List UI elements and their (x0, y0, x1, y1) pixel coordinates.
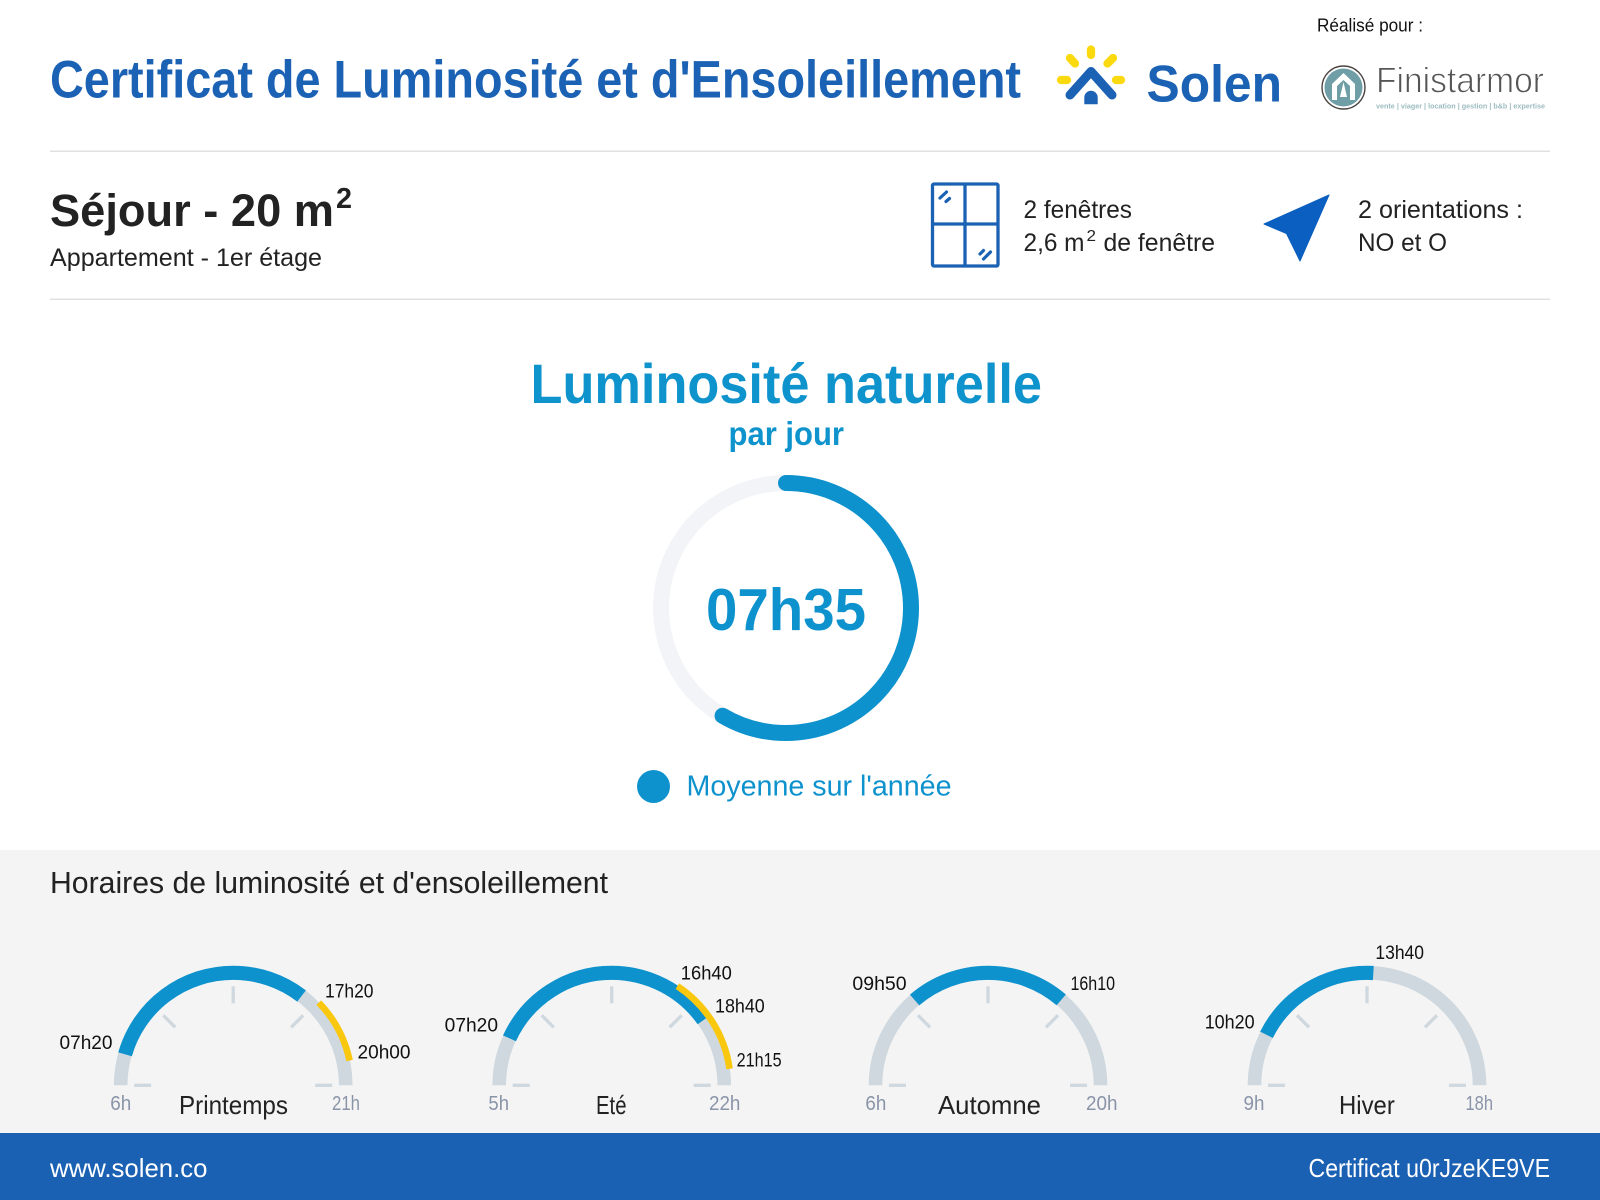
footer (0, 1133, 1600, 1200)
gauge: Eté: 5h (488, 1093, 509, 1115)
gauge: Automne (852, 973, 1118, 1120)
gauge: Hiver: 13h40 (1375, 943, 1424, 964)
panel: schedules (0, 850, 1600, 1134)
Solen wordmark: Solen (1146, 56, 1282, 114)
orientation details (1358, 196, 1523, 257)
icon: Finistarmor emblem (1322, 66, 1365, 109)
icon: sun rays (1061, 50, 1121, 80)
gauge: Printemps: 6h (110, 1093, 131, 1115)
icon: orientation arrow (1264, 195, 1329, 261)
credit label: Réalisé pour : (1317, 16, 1423, 36)
gauge: Hiver (1205, 943, 1493, 1120)
gauge: Hiver: 9h (1244, 1093, 1264, 1115)
gauge: Hiver: Hiver (1339, 1090, 1395, 1120)
gauge: Hiver: 10h20 (1205, 1012, 1255, 1033)
legend: Moyenne sur l'année (686, 770, 952, 802)
gauge: Automne: 20h (1086, 1093, 1118, 1115)
logo: Finistarmor (1322, 60, 1545, 110)
gauge: Printemps: 07h20 (60, 1033, 112, 1054)
daily value: 07h35 (706, 577, 866, 643)
gauge: Printemps: 20h00 (358, 1043, 410, 1064)
gauge: Automne: 16h10 (1070, 974, 1115, 995)
window details: de fenêtre (1104, 229, 1215, 257)
gauge: Eté: Eté (596, 1090, 626, 1120)
gauge: Automne: 6h (865, 1093, 886, 1115)
icon: window (932, 184, 998, 266)
donut chart: daily average (661, 483, 911, 733)
gauge: Printemps: Printemps (179, 1090, 288, 1120)
subheading: per day: par jour (728, 415, 844, 452)
icon: house door (1084, 91, 1098, 104)
title: Certificat de Luminosité et d'Ensoleillement (50, 50, 1021, 110)
gauge: Eté: 16h40 (681, 963, 732, 984)
gauge: Printemps (60, 966, 410, 1120)
certificate id: Certificat u0rJzeKE9VE (1308, 1153, 1550, 1183)
icon: house roof (1070, 72, 1112, 95)
gauge: Printemps: 21h (332, 1093, 360, 1115)
logo: Solen (1061, 50, 1282, 114)
gauge: Printemps: 17h20 (325, 982, 374, 1003)
room heading: 2 (336, 183, 352, 215)
gauge: Eté: 21h15 (737, 1051, 782, 1072)
gauge: Eté: 07h20 (445, 1016, 498, 1037)
gauge: Hiver: 18h (1466, 1093, 1493, 1115)
heading: natural light: Luminosité naturelle (530, 352, 1042, 415)
window details: 2 fenêtres (1024, 196, 1132, 224)
orientation details: NO et O (1358, 229, 1447, 257)
gauge: Eté: 22h (709, 1093, 740, 1115)
orientation details: 2 orientations : (1358, 196, 1523, 224)
room heading: Séjour - 20 m (50, 185, 334, 236)
gauge: Automne: 09h50 (852, 974, 907, 995)
room subtitle: Appartement - 1er étage (50, 244, 322, 272)
Finistarmor wordmark: Finistarmor (1376, 60, 1544, 100)
gauge: Eté: 18h40 (715, 996, 765, 1017)
window details: 2 (1086, 228, 1096, 245)
window details (1024, 196, 1215, 257)
panel heading: Horaires de luminosité et d'ensoleillement (50, 865, 608, 900)
Finistarmor tagline: vente | viager | location | gestion | b&b | expertise (1376, 104, 1545, 110)
footer website: www.solen.co (49, 1153, 207, 1183)
gauge: Automne: Automne (938, 1090, 1041, 1120)
window details: 2,6 m (1024, 229, 1084, 257)
gauge: Eté (445, 963, 782, 1120)
